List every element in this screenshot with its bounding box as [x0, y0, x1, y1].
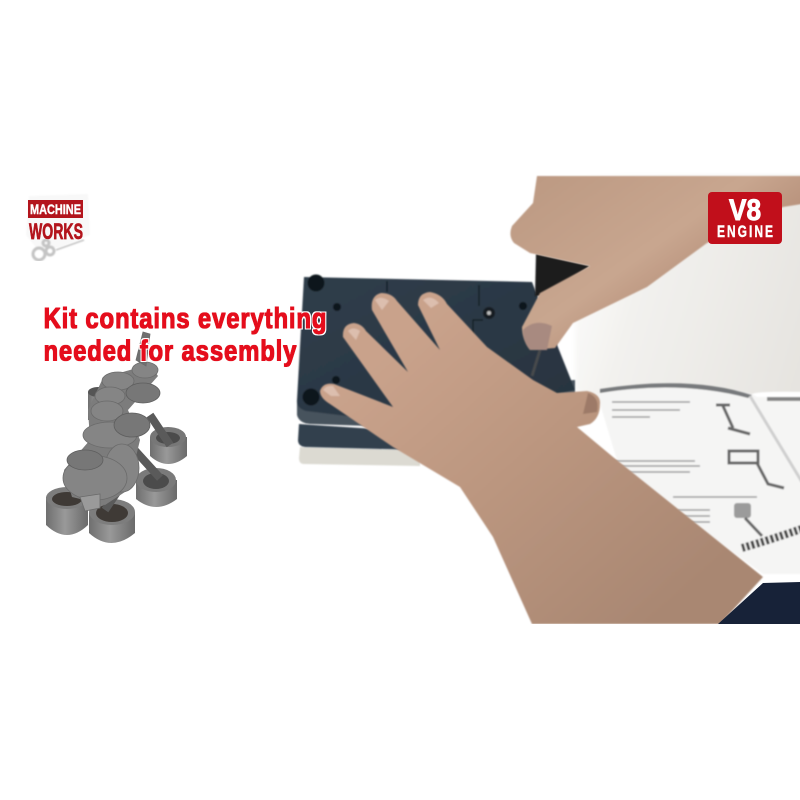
piston front centre — [89, 499, 135, 543]
cover below photo — [500, 624, 800, 654]
piston lower right — [136, 468, 177, 507]
headline line 2: needed for assembly — [44, 334, 297, 367]
booklet diagram: connecting rod — [716, 405, 750, 434]
lower hand and arm — [320, 292, 763, 624]
piston front left — [46, 487, 88, 535]
piston middle right — [150, 427, 187, 464]
crankshaft body and counterweights — [63, 332, 158, 511]
crankshaft rod caps — [67, 383, 160, 470]
sleeve — [705, 581, 800, 640]
logo: gears — [33, 240, 84, 260]
badge label: ENGINE: ENGINE — [717, 223, 773, 242]
badge label: V8: V8 — [729, 194, 761, 227]
booklet text lines — [612, 402, 757, 522]
logo badge backing — [26, 194, 90, 250]
instruction booklet — [597, 383, 800, 574]
headline line 1: Kit contains everything — [44, 302, 327, 335]
badge: V8 Engine — [708, 192, 782, 244]
logo: MACHINE banner: MACHINE — [30, 201, 81, 217]
connecting rods — [75, 415, 170, 510]
logo: WORKS wordmark: WORKS — [29, 219, 83, 244]
screwdriver — [532, 254, 590, 376]
photo backdrop: table and wall — [575, 176, 800, 400]
logo: Machine Works — [26, 194, 90, 260]
piston rear top — [88, 387, 108, 420]
headline caption — [44, 302, 327, 367]
engine parts: pistons and crankshaft — [46, 332, 187, 543]
booklet diagram: piston and rod — [729, 451, 784, 488]
kit case: dark lid — [297, 274, 575, 428]
upper hand holding screwdriver — [510, 176, 800, 350]
kit case: clear base — [299, 447, 420, 466]
kit case: lower dark tray — [298, 424, 420, 450]
booklet diagram: piston over crankshaft — [734, 503, 800, 548]
